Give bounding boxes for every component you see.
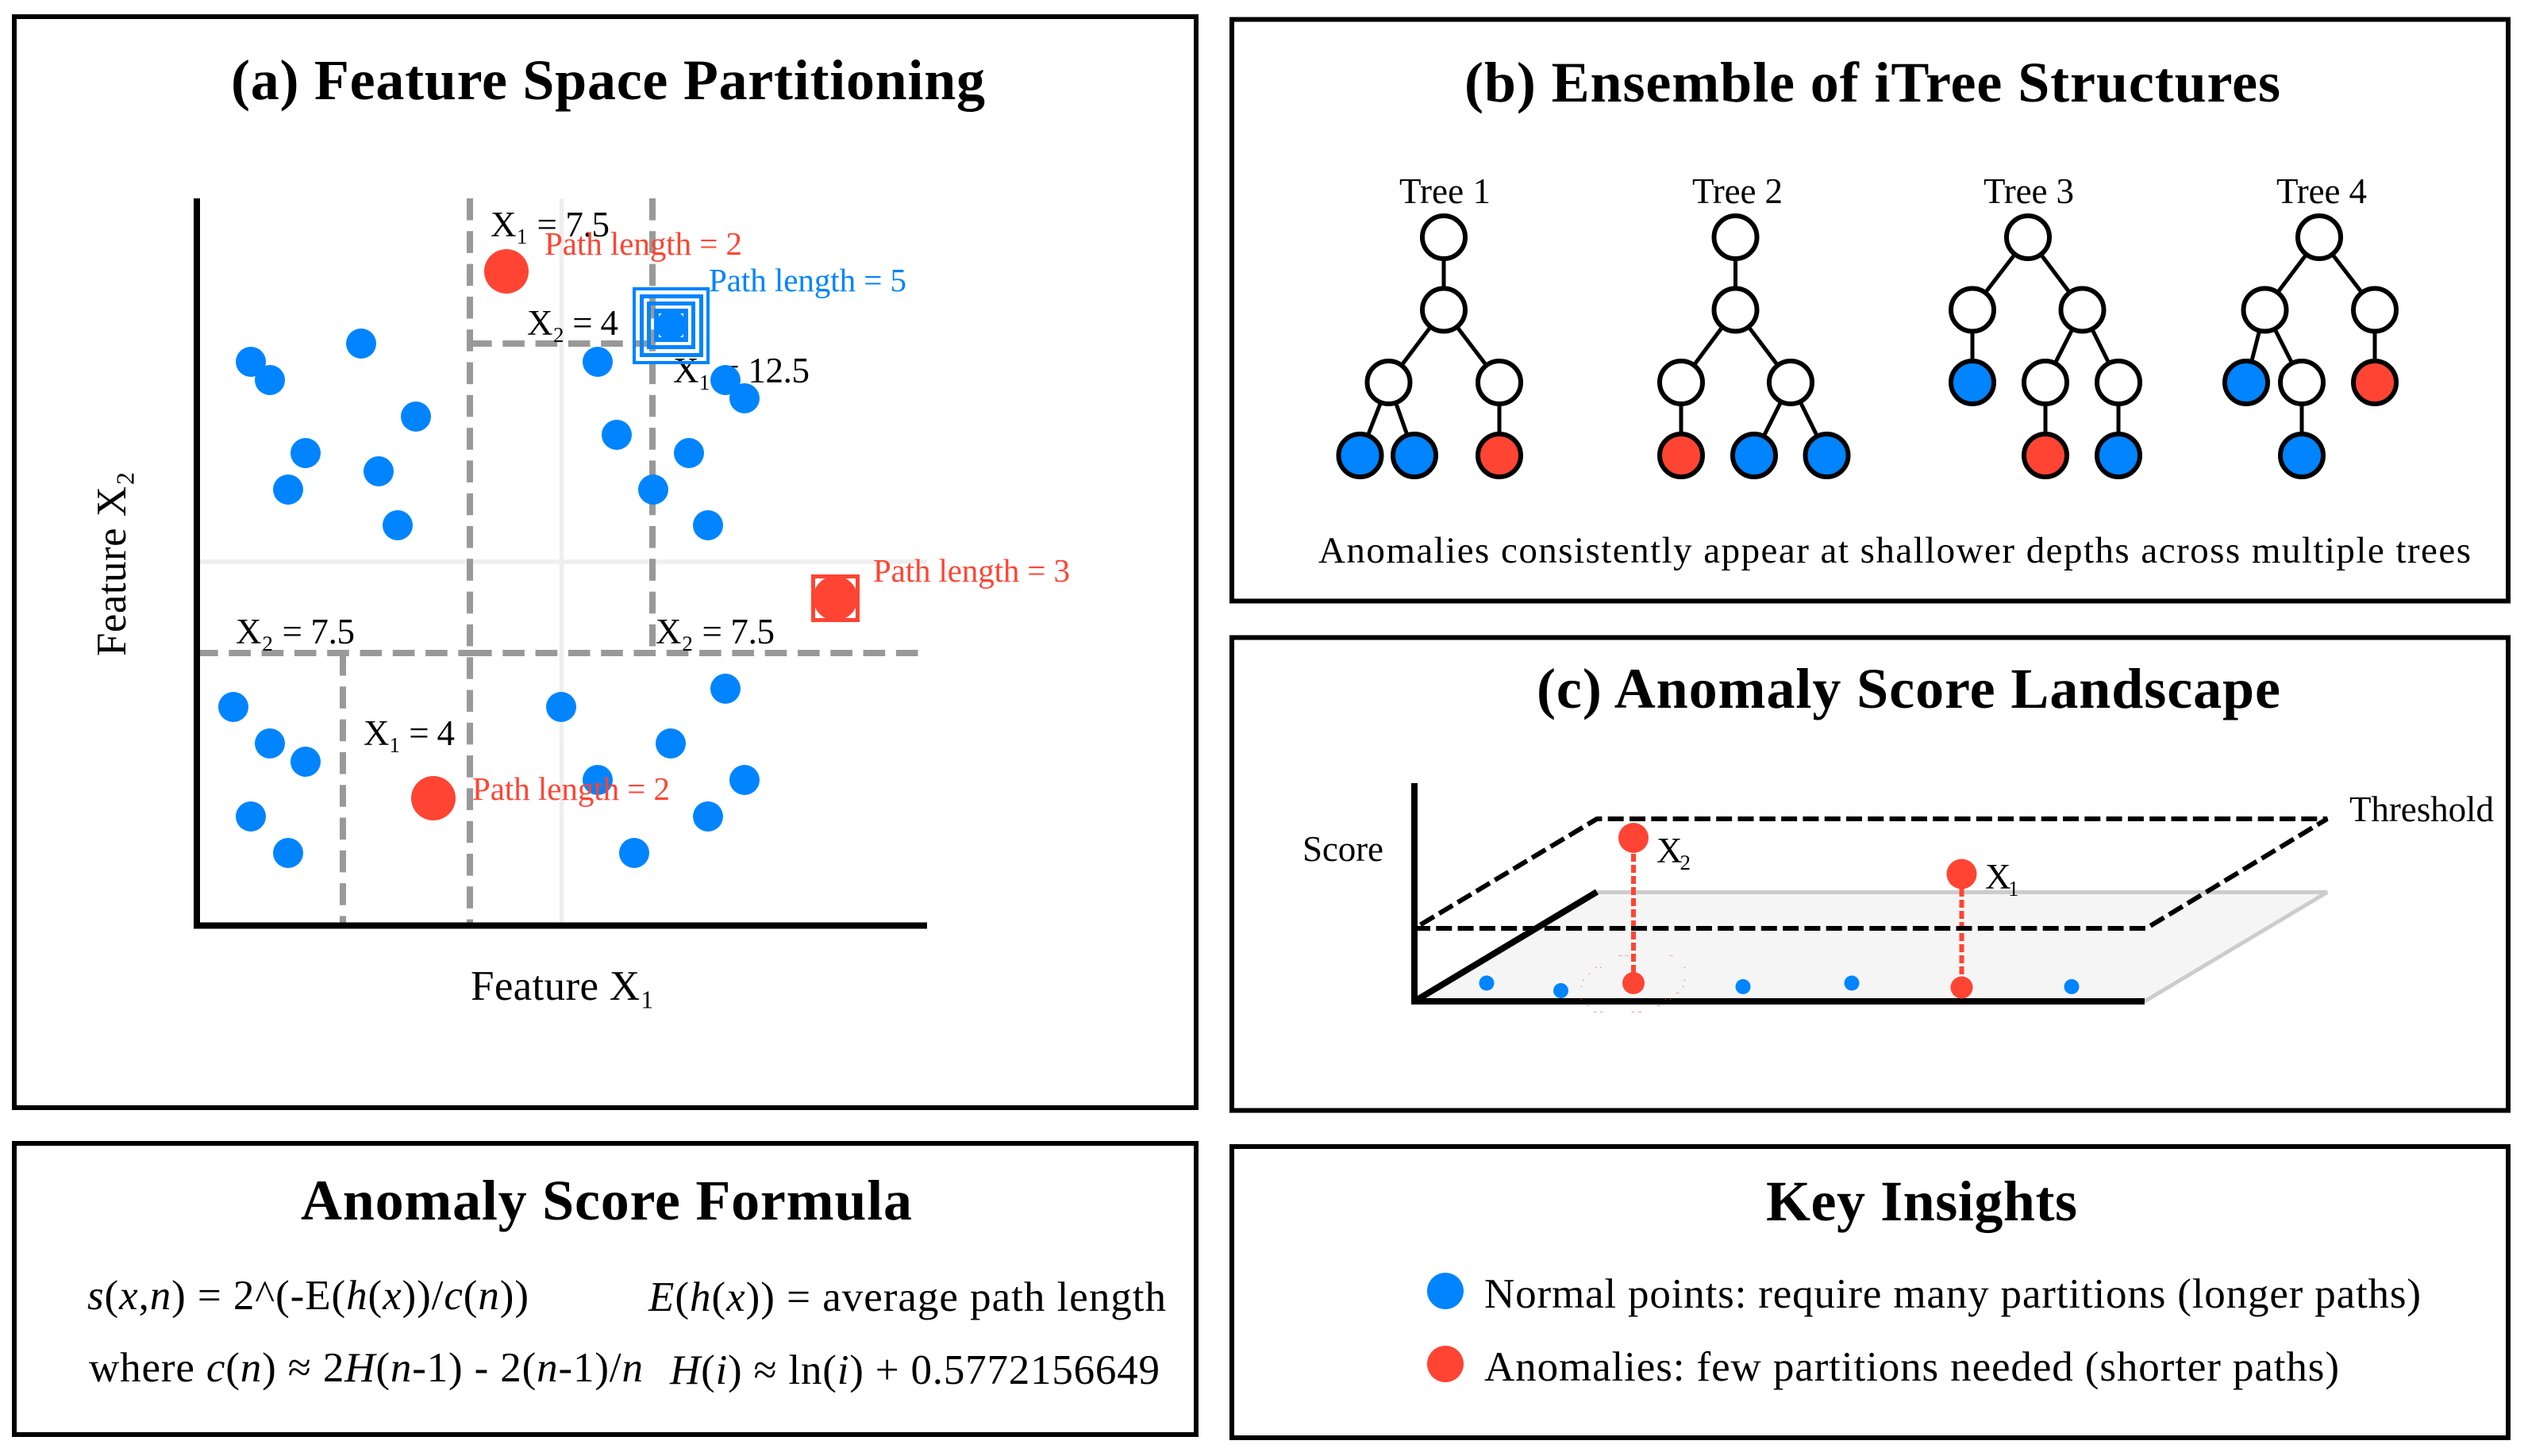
label: path length 3: Path length = 3 (873, 552, 1070, 589)
normal data points (218, 328, 760, 868)
tree 1 (1338, 171, 1521, 477)
label: path length 2 bottom: Path length = 2 (472, 770, 670, 807)
partition lines (196, 198, 927, 925)
heading: formula: Anomaly Score Formula (301, 1169, 912, 1232)
formula: c(n): where c(n) ≈ 2H(n-1) - 2(n-1)/n (89, 1345, 643, 1391)
score plane (1418, 892, 2327, 1001)
anomaly points raised (1618, 823, 1976, 889)
label: X1 = 7.5: X₁ = 7.5 (491, 205, 610, 244)
label: X1: X₁ (1985, 857, 2020, 897)
label: X2 = 7.5 left: X₂ = 7.5 (236, 612, 355, 651)
x axis label: Feature X₁ (471, 963, 655, 1009)
tree 2: Tree 2 (1692, 171, 1783, 211)
red dotted artifact ring (1581, 955, 1685, 1012)
tree 4: Tree 4 (2276, 171, 2367, 211)
normal point: nested partition boxes (634, 289, 708, 363)
y axis label: Feature X₂ (89, 471, 135, 656)
panel: anomaly score formula (14, 1143, 1196, 1435)
label: path length 5: Path length = 5 (709, 262, 906, 298)
tree 2 (1660, 171, 1848, 477)
formula: H(i): H(i) ≈ ln(i) + 0.5772156649 (669, 1347, 1160, 1393)
heading: panel c: (c) Anomaly Score Landscape (1537, 657, 2280, 720)
label: X1 = 4: X₁ = 4 (364, 713, 455, 753)
formula: s(x,n): s(x,n) = 2^(-E(h(x))/c(n)) (87, 1273, 529, 1319)
panel: (a) feature space partitioning (14, 17, 1196, 1108)
tree 3: Tree 3 (1984, 171, 2074, 211)
tree 4 (2225, 171, 2396, 477)
tree 3 (1951, 171, 2140, 477)
anomaly point: top (484, 249, 529, 294)
heading: panel a: (a) Feature Space Partitioning (231, 48, 985, 112)
label: Threshold: Threshold (2349, 789, 2494, 829)
panel: key insights (1232, 1147, 2508, 1438)
threshold plane (1414, 819, 2327, 928)
label: path length 2 top: Path length = 2 (544, 225, 742, 262)
legend: anomalies: Anomalies: few partitions needed (shorter paths) (1484, 1344, 2339, 1390)
label: X2 = 7.5 right: X₂ = 7.5 (656, 612, 775, 651)
heading: panel b: (b) Ensemble of iTree Structures (1464, 51, 2280, 114)
panel: (c) anomaly score landscape (1232, 638, 2508, 1111)
label: X2: X₂ (1656, 831, 1691, 870)
axes (1414, 783, 2145, 1005)
plot axes (194, 198, 927, 928)
label: X2 = 4: X₂ = 4 (527, 303, 618, 343)
caption: panel b: Anomalies consistently appear at shallower depths across multiple trees (1318, 530, 2471, 571)
tree 1: Tree 1 (1399, 171, 1491, 211)
heading: key insights: Key Insights (1766, 1170, 2077, 1233)
anomaly projections on plane (1622, 972, 1973, 998)
normal points over label (710, 365, 760, 413)
normal points on plane (1479, 976, 2080, 998)
legend: normal points: Normal points: require many partitions (longer paths) (1484, 1271, 2421, 1317)
anomaly point: boxed (813, 576, 857, 620)
label: X1 = 12.5: X₁ = 12.5 (673, 351, 810, 390)
anomaly point: bottom (411, 776, 456, 820)
panel: (b) ensemble of iTree structures (1232, 19, 2508, 601)
anomaly stems (1633, 843, 1962, 988)
formula: E(h(x)): E(h(x)) = average path length (648, 1274, 1166, 1320)
label: Score: Score (1302, 829, 1383, 869)
